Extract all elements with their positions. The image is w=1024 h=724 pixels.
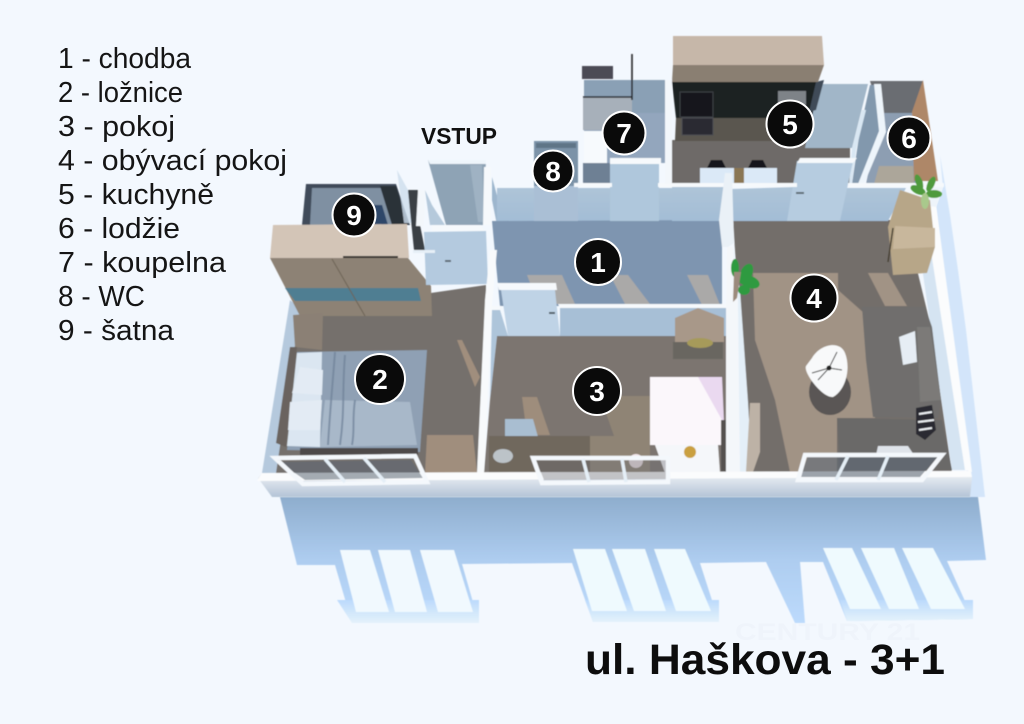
window: room 3 xyxy=(533,458,668,483)
title: ul. Haškova - 3+1 xyxy=(585,636,945,684)
room 2: bedroom floor xyxy=(262,285,486,473)
right exterior wall xyxy=(916,187,972,472)
marker 1 xyxy=(575,239,621,285)
living room furniture: coffee table xyxy=(806,345,851,415)
room 3 furniture: desk and chair xyxy=(489,419,590,473)
window: bedroom xyxy=(275,456,427,484)
living room furniture: sideboard xyxy=(888,190,935,275)
legend: room list: 2 - ložnice xyxy=(58,77,183,109)
bedroom furniture: bed and bedside table xyxy=(276,313,427,455)
marker 1: 1 xyxy=(590,247,606,278)
marker 2: 2 xyxy=(372,364,388,395)
wall between bedroom and room 3 xyxy=(477,250,497,473)
room 7: bathroom xyxy=(582,54,666,184)
legend: room list: 6 - lodžie xyxy=(58,213,180,245)
room 6: loggia xyxy=(849,80,938,184)
marker 9: 9 xyxy=(346,200,362,231)
legend: room list xyxy=(58,43,287,347)
floor plan xyxy=(257,36,972,497)
icon: plant by partition xyxy=(731,259,761,302)
room 3 furniture: shelf xyxy=(673,308,724,359)
marker 7 xyxy=(602,112,646,154)
legend: room list: 8 - WC xyxy=(58,281,145,313)
legend: room list: 1 - chodba xyxy=(58,43,192,75)
marker 7: 7 xyxy=(616,118,632,149)
partition between hallway and living room xyxy=(719,173,760,472)
marker 9 xyxy=(332,194,376,236)
legend: room list: 3 - pokoj xyxy=(58,111,175,143)
door and wall to room 3 xyxy=(490,283,726,400)
icon: plant on sideboard xyxy=(909,173,942,209)
living room furniture: corner sofa xyxy=(837,307,952,470)
room 4: living room floor xyxy=(733,220,952,473)
marker 8 xyxy=(532,150,574,192)
room 3 furniture: bed xyxy=(629,377,726,473)
marker 4 xyxy=(790,274,838,322)
room 1: hallway xyxy=(492,80,723,306)
room 4 back wall with door xyxy=(672,158,944,221)
front exterior wall xyxy=(257,471,972,497)
marker 4: 4 xyxy=(806,283,822,314)
room 9: walk-in closet xyxy=(302,170,425,250)
legend: room list: 9 - šatna xyxy=(58,315,175,347)
window: living room xyxy=(798,455,942,480)
building shadow with window light xyxy=(280,155,986,623)
legend: room list: 5 - kuchyně xyxy=(58,179,214,211)
entrance label: VSTUP xyxy=(421,123,497,149)
marker 6: 6 xyxy=(901,123,917,154)
marker 5: 5 xyxy=(782,109,798,140)
room 5: kitchen xyxy=(672,36,868,184)
marker 8: 8 xyxy=(545,156,561,187)
bedroom furniture: wardrobe xyxy=(270,224,432,316)
entrance hall and front door xyxy=(416,160,505,226)
marker 2 xyxy=(355,354,405,404)
marker 5 xyxy=(766,100,814,148)
legend: room list: 4 - obývací pokoj xyxy=(58,145,287,177)
marker 3: 3 xyxy=(589,376,605,407)
door and wall by entrance xyxy=(413,225,488,285)
room 8: WC xyxy=(534,141,578,186)
room 3: room floor xyxy=(484,336,726,473)
legend: room list: 7 - koupelna xyxy=(58,247,227,279)
watermark: CENTURY 21 xyxy=(735,619,920,646)
marker 6 xyxy=(888,116,930,160)
marker 3 xyxy=(573,367,621,415)
